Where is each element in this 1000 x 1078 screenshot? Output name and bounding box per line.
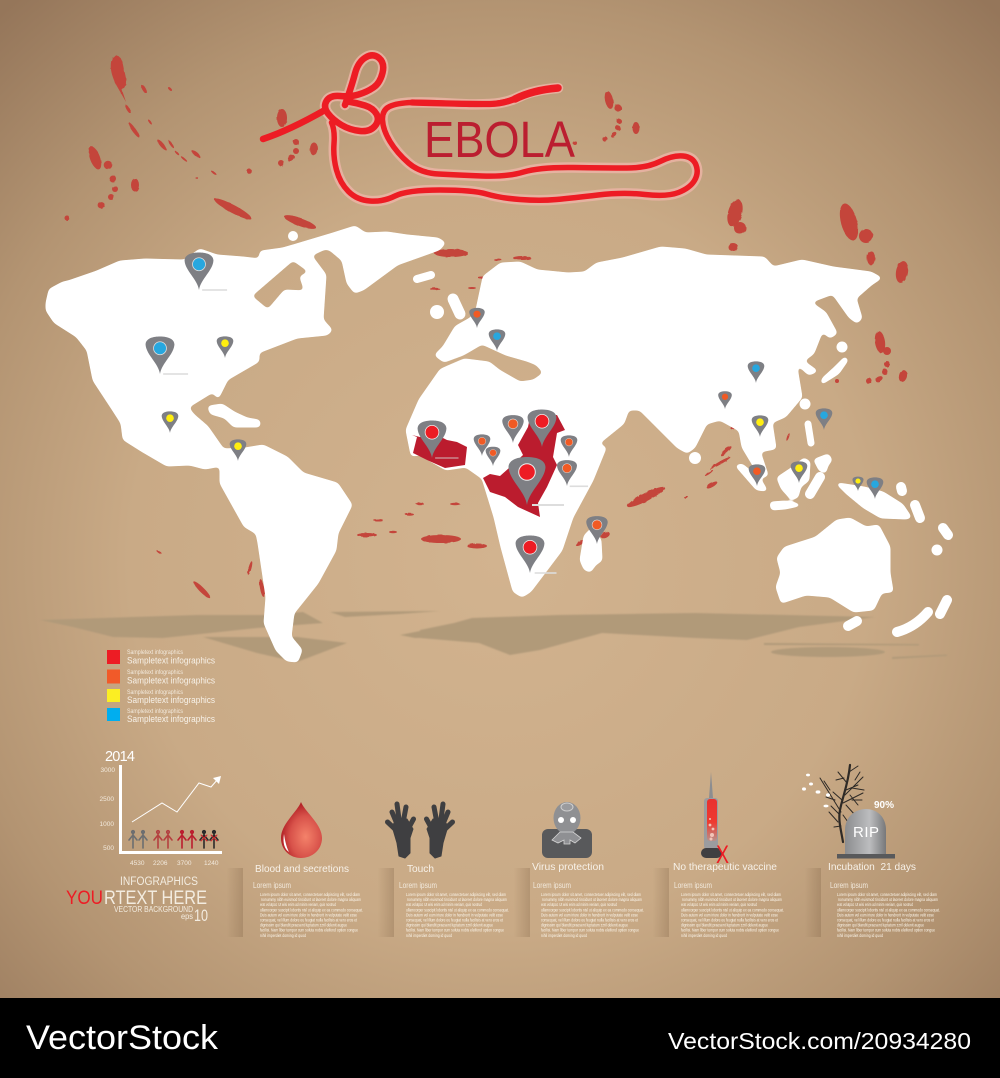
card: blood and secretions: Duis autem vel eum iriure dolor in hendrerit in vulputate velit esse (260, 912, 357, 917)
chart x labels: 2206 (153, 860, 168, 867)
card: no therapeutic vaccine: Lorem ipsum (674, 881, 712, 890)
card: virus protection: Virus protection (532, 861, 604, 873)
card: touch: Lorem ipsum dolor sit amet, consectetuer adipiscing elit, sed diam (406, 892, 506, 897)
card: no therapeutic vaccine: nonummy nibh euismod tincidunt ut laoreet dolore magna aliquam (682, 897, 782, 902)
card: incubation 21 days: facilisi. Nam liber tempor cum soluta nobis eleifend option congue (837, 928, 935, 933)
legend: orange (107, 670, 215, 686)
island: Madagascar (581, 529, 601, 571)
pin: orange Nigeria north (474, 434, 490, 456)
card: blood and secretions: erat volutpat. Ut wisi enim ad minim veniam, quis nostrud (260, 902, 336, 907)
card: virus protection (514, 861, 644, 938)
legend: yellow (107, 689, 215, 705)
chart y labels: 500 (103, 845, 114, 852)
card: no therapeutic vaccine: ullamcorper suscipit lobortis nisl ut aliquip ex ea commodo consequat. (681, 907, 784, 912)
pin: orange Europe (469, 308, 485, 328)
pin: orange Sumatra (749, 464, 765, 486)
pin: blue Philippines (816, 408, 832, 430)
card: touch: erat volutpat. Ut wisi enim ad minim veniam, quis nostrud (406, 902, 482, 907)
card: touch: facilisi. Nam liber tempor cum soluta nobis eleifend option congue (406, 928, 504, 933)
card: incubation 21 days: dignissim qui blandit praesent luptatum zzril delenit augue (837, 923, 924, 928)
continent: Australia (777, 519, 892, 611)
legend: red: Sampletext infographics (127, 656, 215, 666)
islands: Caribbean (209, 405, 259, 426)
card: incubation 21 days: Incubation 21 days (828, 861, 916, 873)
card: no therapeutic vaccine (653, 861, 784, 938)
card: no therapeutic vaccine: No therapeutic vaccine (673, 861, 777, 873)
card: blood and secretions: Lorem ipsum dolor sit amet, consectetuer adipiscing elit, sed diam (260, 892, 360, 897)
card: no therapeutic vaccine: nihil imperdiet doming id quod (681, 933, 727, 938)
pin: orange Bangladesh (718, 391, 732, 409)
dead tree (820, 765, 864, 842)
chart axes (120, 765, 222, 852)
card: no therapeutic vaccine: consequat, vel illum dolore eu feugiat nulla facilisis at vero eros et (681, 918, 779, 922)
map pins (146, 253, 883, 574)
card: touch: ullamcorper suscipit lobortis nisl ut aliquip ex ea commodo consequat. (406, 907, 509, 912)
90 percent label: 90% (874, 800, 894, 811)
legend: blue: Sampletext infographics (127, 714, 215, 724)
card: incubation 21 days (805, 861, 940, 938)
icon: syringe with cross: X (716, 841, 729, 869)
pin: yellow Panama (230, 439, 246, 461)
card: incubation 21 days: Lorem ipsum dolor sit amet, consectetuer adipiscing elit, sed diam (837, 892, 937, 897)
blood splatters (64, 56, 910, 600)
pin: yellow Mexico (162, 411, 178, 433)
card: blood and secretions (227, 863, 363, 938)
gravestone (845, 809, 886, 854)
icon: tombstone, tree and birds (802, 765, 895, 858)
pin: orange Nigeria (486, 447, 500, 466)
title: Ebola virus ribbon and wordmark (263, 55, 697, 201)
map shadow (40, 611, 947, 662)
brand text block: RTEXT HERE (104, 888, 207, 909)
card: no therapeutic vaccine: erat volutpat. Ut wisi enim ad minim veniam, quis nostrud (681, 902, 757, 907)
card: blood and secretions: ullamcorper suscipit lobortis nisl ut aliquip ex ea commodo consequat. (260, 907, 363, 912)
card: no therapeutic vaccine: Duis autem vel eum iriure dolor in hendrerit in vulputate velit esse (681, 912, 778, 917)
pin: red South Africa (516, 536, 557, 574)
card: incubation 21 days: Duis autem vel eum iriure dolor in hendrerit in vulputate velit esse (837, 912, 934, 917)
card: no therapeutic vaccine: dignissim qui blandit praesent luptatum zzril delenit augue (681, 923, 768, 928)
icon: syringe with cross (701, 772, 729, 869)
ribbon knot (325, 55, 383, 131)
card: touch: nonummy nibh euismod tincidunt ut laoreet dolore magna aliquam (407, 897, 507, 902)
chart y labels: 1000 (100, 821, 114, 828)
legend: red (107, 650, 215, 666)
card: incubation 21 days: Lorem ipsum (830, 881, 868, 890)
legend: blue (107, 708, 215, 724)
line chart 2014 (100, 749, 222, 867)
chart x labels: 3700 (177, 860, 192, 867)
island: Japan (822, 358, 847, 383)
card: incubation 21 days: nonummy nibh euismod tincidunt ut laoreet dolore magna aliquam (838, 897, 938, 902)
pin: red West Africa (418, 421, 459, 459)
pin: red Congo (508, 457, 564, 506)
icon: blood drop (281, 802, 322, 858)
brand text block: YOU (66, 888, 103, 909)
birds (802, 774, 830, 807)
ribbon thick top tip (515, 88, 558, 99)
legend: red: Sampletext infographics (127, 650, 183, 656)
chart trend line (132, 779, 218, 822)
ribbon medium top strand (412, 96, 520, 104)
affected countries (412, 415, 565, 517)
pin: orange Ethiopia (561, 435, 577, 457)
chart y labels: 2500 (100, 796, 114, 803)
icon: tombstone, tree and birds: RIP (853, 824, 879, 841)
card: blood and secretions: facilisi. Nam liber tempor cum soluta nobis eleifend option congue (260, 928, 358, 933)
legend: orange: Sampletext infographics (127, 670, 183, 676)
chart year: 2014 (105, 749, 135, 765)
chart y labels (100, 767, 115, 852)
chart y labels: 3000 (101, 767, 115, 774)
pin: blue USA (146, 337, 188, 375)
pin: red Sudan (528, 410, 556, 447)
pin: blue Italy (489, 329, 505, 351)
legend: yellow: Sampletext infographics (127, 690, 183, 696)
pin: orange Sahara (502, 415, 524, 443)
card: virus protection: facilisi. Nam liber tempor cum soluta nobis eleifend option congue (541, 928, 639, 933)
legend: blue: Sampletext infographics (127, 709, 183, 715)
footer bar (0, 998, 1000, 1078)
icon: two hands (388, 804, 452, 858)
brand text block: VECTOR BACKGROUND (114, 905, 193, 914)
brand text block: 10 (194, 906, 208, 925)
pin: yellow Borneo (791, 461, 807, 483)
card: incubation 21 days: nihil imperdiet doming id quod (837, 933, 883, 938)
legend (107, 650, 215, 724)
card: blood and secretions: Blood and secretions (255, 863, 349, 875)
card: virus protection: Lorem ipsum dolor sit amet, consectetuer adipiscing elit, sed diam (541, 892, 641, 897)
card: no therapeutic vaccine: facilisi. Nam liber tempor cum soluta nobis eleifend option congue (681, 928, 779, 933)
EBOLA heading: EBOLA (424, 111, 575, 168)
pin: blue New Guinea (867, 477, 883, 499)
continent: the Americas (47, 227, 444, 661)
legend: orange: Sampletext infographics (127, 676, 215, 686)
pin: yellow Vietnam (752, 415, 768, 437)
chart x labels: 1240 (204, 860, 219, 867)
islands: Indonesia and Philippines (737, 465, 766, 490)
island: New Guinea (838, 484, 910, 518)
card: virus protection: nihil imperdiet doming id quod (541, 933, 587, 938)
card: incubation 21 days: consequat, vel illum dolore eu feugiat nulla facilisis at vero eros et (837, 918, 935, 922)
card: no therapeutic vaccine: Lorem ipsum dolor sit amet, consectetuer adipiscing elit, sed diam (681, 892, 781, 897)
card: touch: Touch (407, 863, 434, 875)
continent: Afro-Eurasia (407, 248, 880, 596)
footer logo: VectorStock (26, 1019, 219, 1057)
card: touch (378, 863, 509, 938)
card: blood and secretions: nonummy nibh euismod tincidunt ut laoreet dolore magna aliquam (261, 897, 361, 902)
pin: yellow New Guinea (852, 477, 864, 491)
people pictograms (129, 831, 218, 848)
chart arrow head (213, 776, 221, 784)
footer image id: VectorStock.com/20934280 (668, 1028, 971, 1054)
small capsule islands (288, 231, 948, 632)
card: virus protection: ullamcorper suscipit lobortis nisl ut aliquip ex ea commodo consequat. (541, 907, 644, 912)
pin: blue China (748, 361, 764, 383)
chart x labels: 4530 (130, 860, 145, 867)
card: touch: Lorem ipsum (399, 881, 437, 890)
card: blood and secretions: dignissim qui blandit praesent luptatum zzril delenit augue (260, 923, 347, 928)
card: blood and secretions: Lorem ipsum (253, 881, 291, 890)
card: virus protection: erat volutpat. Ut wisi enim ad minim veniam, quis nostrud (541, 902, 617, 907)
brand text block (66, 876, 208, 925)
card: touch: consequat, vel illum dolore eu feugiat nulla facilisis at vero eros et (406, 918, 504, 922)
card: blood and secretions: nihil imperdiet doming id quod (260, 933, 306, 938)
icon: gas mask figure (542, 802, 592, 858)
card: blood and secretions: consequat, vel illum dolore eu feugiat nulla facilisis at vero eros et (260, 918, 358, 922)
card: incubation 21 days: ullamcorper suscipit lobortis nisl ut aliquip ex ea commodo consequat. (837, 907, 940, 912)
card: touch: dignissim qui blandit praesent luptatum zzril delenit augue (406, 923, 493, 928)
pin: yellow USA east (217, 336, 233, 358)
pin: orange Kenya (557, 460, 588, 487)
card: virus protection: nonummy nibh euismod tincidunt ut laoreet dolore magna aliquam (542, 897, 642, 902)
pin: blue Canada (185, 253, 227, 291)
ribbon halo (325, 55, 697, 201)
legend: yellow: Sampletext infographics (127, 695, 215, 705)
pin: orange Madagascar (586, 516, 608, 544)
card: virus protection: consequat, vel illum dolore eu feugiat nulla facilisis at vero eros et (541, 918, 639, 922)
brand text block: INFOGRAPHICS (120, 876, 198, 888)
card: touch: Duis autem vel eum iriure dolor in hendrerit in vulputate velit esse (406, 912, 503, 917)
brand text block: eps (181, 912, 193, 921)
world map (47, 227, 910, 661)
card: virus protection: dignissim qui blandit praesent luptatum zzril delenit augue (541, 923, 628, 928)
card: incubation 21 days: erat volutpat. Ut wisi enim ad minim veniam, quis nostrud (837, 902, 913, 907)
card: virus protection: Lorem ipsum (533, 881, 571, 890)
chart x labels (130, 860, 219, 867)
card: virus protection: Duis autem vel eum iriure dolor in hendrerit in vulputate velit esse (541, 912, 638, 917)
card: touch: nihil imperdiet doming id quod (406, 933, 452, 938)
ribbon strand (332, 88, 697, 201)
ribbon tail (263, 110, 325, 139)
